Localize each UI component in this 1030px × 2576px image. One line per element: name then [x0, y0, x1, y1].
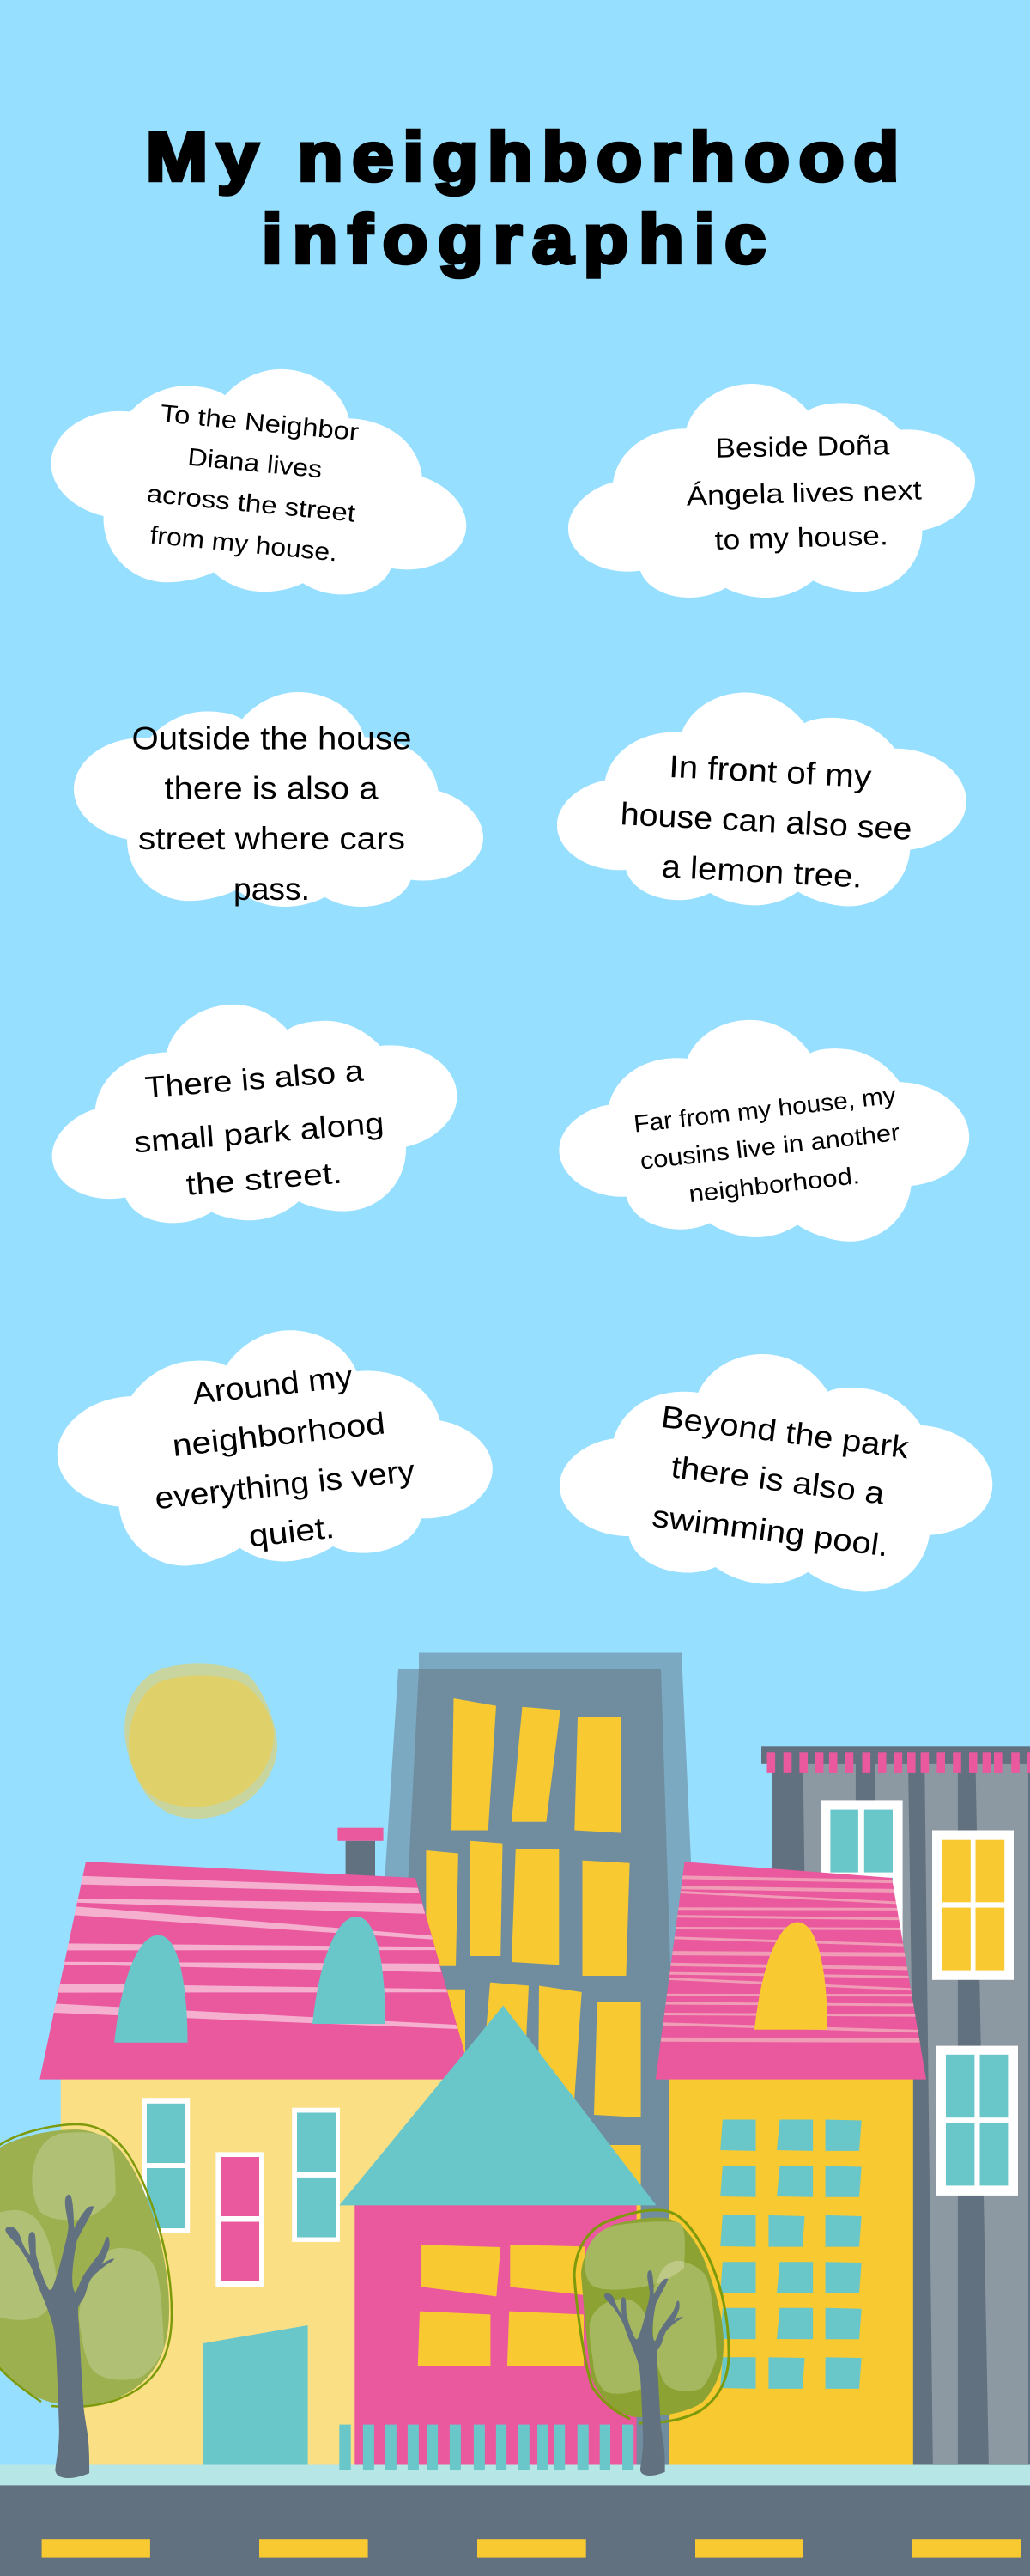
grey wall panels — [803, 1764, 1028, 2464]
roof stripes — [661, 1877, 923, 2040]
dormer left — [114, 1935, 187, 2043]
panel: cloud beyond the park — [549, 1328, 1007, 1613]
road dashes — [42, 2539, 1021, 2558]
trunk — [604, 2270, 683, 2476]
cloud shape — [568, 384, 975, 598]
panel: cloud around my neighborhood — [46, 1310, 500, 1584]
cloud text: In front of my — [668, 749, 873, 794]
pink roof — [656, 1862, 926, 2080]
cloud text: cousins live in another — [639, 1119, 901, 1175]
center pink house — [339, 2006, 657, 2465]
pink roof — [39, 1862, 472, 2080]
cloud text — [620, 749, 912, 895]
window pink — [215, 2152, 264, 2287]
cloud text: to my house. — [714, 519, 888, 556]
cloud text: street where cars — [138, 821, 405, 856]
grey apartment building — [761, 1746, 1030, 2469]
cloud text: everything is very — [153, 1453, 416, 1516]
cloud text: from my house. — [148, 522, 338, 567]
door — [203, 2325, 308, 2465]
panel: cloud small park — [47, 997, 461, 1227]
right yellow house — [656, 1862, 926, 2465]
tower windows — [426, 1698, 641, 2224]
cloud text: house can also see — [620, 796, 912, 847]
cloud text: a lemon tree. — [661, 848, 863, 895]
cloud text: the street. — [185, 1157, 343, 1202]
cloud text: there is also a — [670, 1449, 888, 1511]
road — [0, 2485, 1030, 2576]
cloud text: there is also a — [165, 771, 379, 806]
cloud text — [686, 429, 922, 556]
title: My neighborhood — [146, 118, 908, 195]
cloud text — [633, 1082, 901, 1207]
house wall — [61, 2079, 456, 2465]
foliage — [0, 2124, 172, 2407]
cloud text: Beyond the park — [659, 1399, 912, 1465]
left yellow house — [39, 1828, 472, 2465]
cloud shape — [549, 1328, 1007, 1613]
apartment window yellow — [932, 1831, 1014, 1980]
title — [146, 118, 908, 277]
cloud shape — [47, 997, 461, 1227]
cloud text: small park along — [133, 1107, 385, 1159]
foliage — [574, 2210, 729, 2423]
cloud text: Ángela lives next — [686, 474, 922, 512]
right tree — [574, 2210, 729, 2476]
dormer right — [312, 1917, 385, 2024]
left tree — [0, 2124, 172, 2478]
cloud text — [133, 1054, 385, 1202]
grid of teal windows — [720, 2119, 862, 2389]
apartment window teal lower — [936, 2046, 1018, 2196]
teal triangular roof — [339, 2006, 657, 2205]
panel: cloud beside doña — [568, 384, 975, 598]
chimney — [337, 1828, 384, 1879]
cloud text: across the street — [145, 480, 356, 528]
cloud text: Far from my house, my — [633, 1082, 897, 1138]
cloud text — [132, 721, 412, 907]
panel: cloud outside the house — [74, 692, 483, 907]
cloud text: Around my — [191, 1358, 354, 1411]
cloud text: neighborhood. — [688, 1162, 861, 1207]
house windows — [418, 2245, 585, 2366]
cloud text: Outside the house — [132, 721, 412, 756]
cornice with pink teeth — [761, 1746, 1030, 1773]
cloud text: pass. — [233, 872, 310, 907]
window teal left — [142, 2098, 190, 2233]
trunk — [5, 2195, 114, 2478]
teal picket fence — [339, 2425, 633, 2470]
cloud text — [145, 400, 360, 567]
apartment window teal upper — [821, 1800, 903, 1958]
cloud shape — [47, 361, 471, 598]
cloud shape — [552, 1001, 979, 1259]
cloud text — [153, 1358, 416, 1553]
roof stripes — [53, 1876, 457, 2029]
panel: cloud far from my house — [552, 1001, 979, 1259]
cloud text: Beside Doña — [715, 429, 890, 464]
house wall — [669, 2079, 913, 2465]
panel: cloud to the neighbor — [47, 361, 471, 598]
cloud text: There is also a — [143, 1054, 365, 1104]
cloud text — [651, 1399, 912, 1564]
cloud text: swimming pool. — [651, 1498, 891, 1564]
cloud text: quiet. — [247, 1510, 336, 1553]
panel: cloud in front of my house — [552, 680, 973, 920]
sun — [124, 1663, 277, 1819]
cloud text: neighborhood — [171, 1405, 387, 1463]
cloud text: To the Neighbor — [159, 400, 360, 447]
sidewalk — [0, 2464, 1030, 2485]
dormer yellow — [754, 1922, 827, 2030]
cloud shape — [46, 1310, 500, 1584]
cloud shape — [552, 680, 973, 920]
house wall — [354, 2205, 637, 2465]
title: infographic — [262, 201, 776, 277]
tall blue-grey tower — [369, 1652, 704, 2473]
cloud shape — [74, 692, 483, 907]
window teal right — [292, 2108, 340, 2242]
cloud text: Diana lives — [186, 444, 324, 483]
